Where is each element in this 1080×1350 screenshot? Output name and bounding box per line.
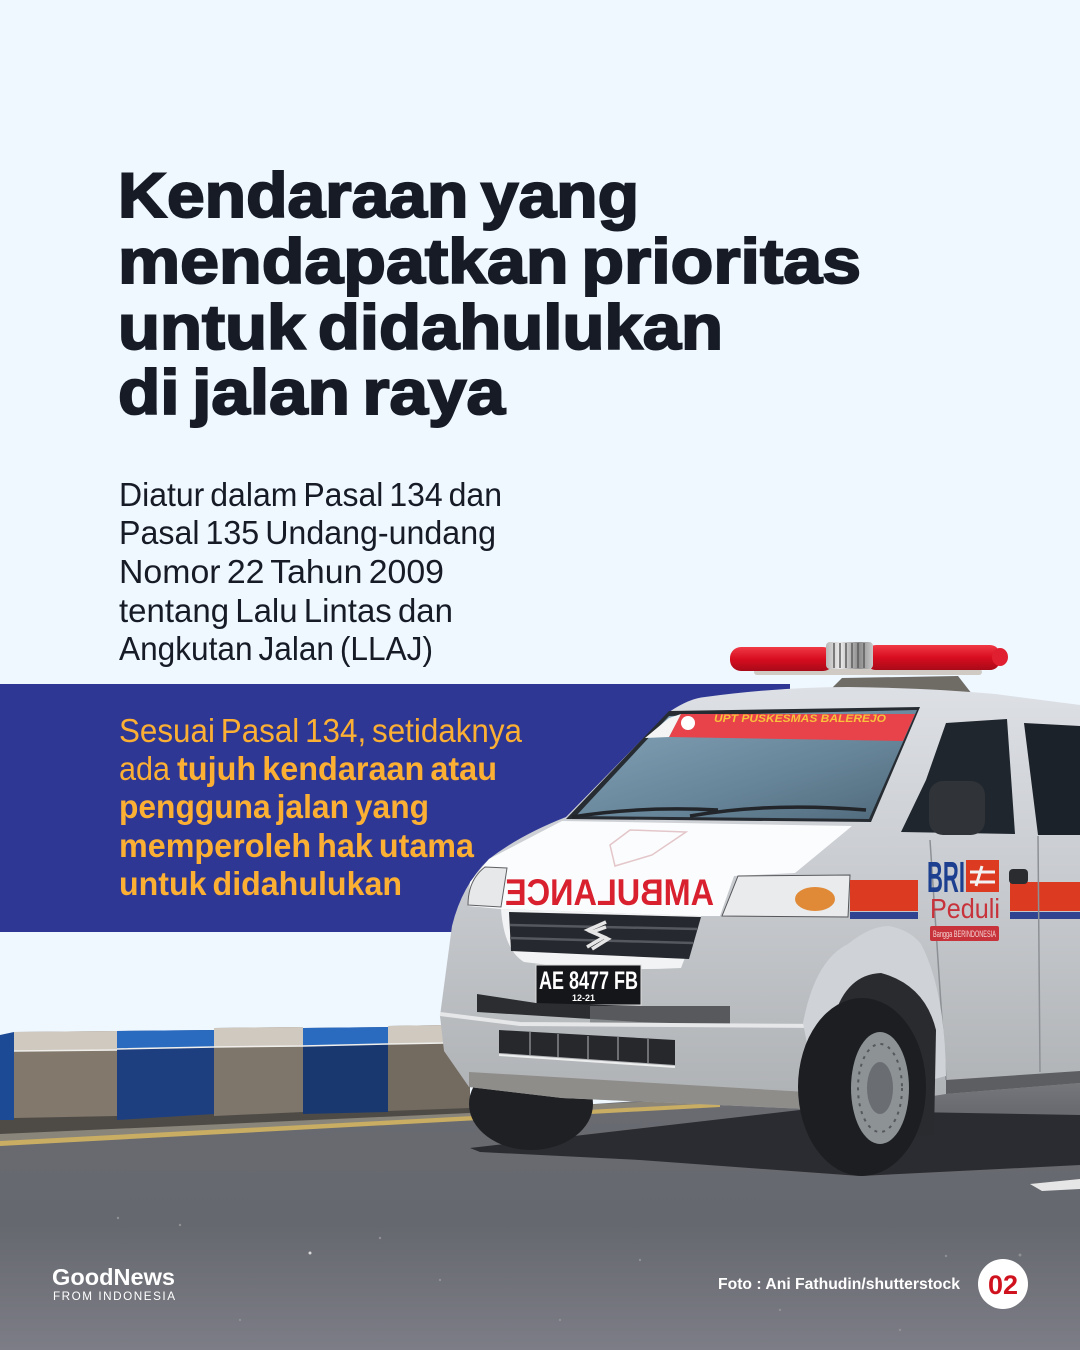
heading (118, 161, 861, 428)
road speckles (117, 1217, 1022, 1331)
GoodNews logo: FROM INDONESIA (53, 1290, 175, 1303)
callout text: untuk didahulukan (119, 865, 402, 902)
intro text block: Diatur dalam Pasal 134 dan (119, 476, 502, 513)
intro text block: Nomor 22 Tahun 2009 (119, 553, 444, 590)
road (0, 1070, 1080, 1350)
right headlight (722, 875, 850, 917)
front grille (509, 912, 701, 959)
under bumper (469, 1072, 807, 1109)
intro text block: Angkutan Jalan (LLAJ) (119, 630, 433, 667)
mirrored AMBULANCE lettering: AMBULANCE (505, 872, 714, 913)
hood (468, 821, 852, 916)
page number badge (978, 1259, 1028, 1309)
grille surround (501, 909, 701, 969)
left headlight (468, 867, 507, 907)
hood emblem faint (610, 830, 686, 866)
heading: di jalan raya (118, 358, 506, 428)
side mirror (929, 781, 985, 835)
photo credit: Foto : Ani Fathudin/shutterstock (718, 1276, 960, 1293)
callout text: tujuh kendaraan atau (177, 750, 497, 787)
heading: Kendaraan yang (118, 161, 639, 231)
sill (946, 1071, 1080, 1094)
bumper air intake upper (477, 994, 730, 1025)
front tyre and rim (798, 998, 926, 1176)
callout text: ada (119, 750, 171, 787)
BRI Peduli decal: BRI (927, 853, 965, 902)
license plate (536, 965, 641, 1005)
car shadow on road (470, 1110, 1080, 1176)
windshield (566, 707, 920, 822)
intro text block: Pasal 135 Undang-undang (119, 514, 496, 551)
heading: untuk didahulukan (118, 293, 723, 363)
emergency light bar (730, 642, 1008, 671)
Suzuki emblem (587, 922, 608, 949)
road marking (1030, 1179, 1080, 1191)
BRI Peduli decal: Peduli (930, 893, 1000, 924)
BRI Peduli decal: Bangga BERINDONESIA (933, 929, 996, 939)
wipers (572, 807, 866, 817)
intro text block: tentang Lalu Lintas dan (119, 592, 453, 629)
front-left tyre (469, 1058, 593, 1150)
road edge line (0, 1103, 720, 1146)
ambulance photo illustration (440, 642, 1080, 1176)
callout text: memperoleh hak utama (119, 827, 475, 864)
lower intake (499, 1030, 675, 1067)
GoodNews logo: GoodNews (52, 1264, 175, 1290)
sticker text: UPT PUSKESMAS BALEREJO (714, 713, 886, 725)
heading: mendapatkan prioritas (118, 227, 861, 297)
door handle (1009, 869, 1028, 884)
roadside kerb (0, 1025, 470, 1134)
callout text: Sesuai Pasal 134, setidaknya (119, 712, 523, 749)
kerb highlight line (14, 1043, 445, 1051)
callout text (119, 712, 523, 902)
roof light base (754, 669, 982, 694)
GoodNews logo (52, 1264, 175, 1303)
vehicle body (440, 687, 1080, 1109)
windshield sticker strip (669, 714, 915, 741)
BRI Peduli decal (927, 853, 1000, 941)
license plate: AE 8477 FB (539, 967, 638, 995)
panel: blue band (0, 684, 790, 932)
wheel arch and fender (803, 926, 946, 1110)
intro text block (119, 476, 502, 667)
page number badge: 02 (988, 1270, 1018, 1300)
side windows (901, 719, 1080, 835)
bumper (440, 1014, 828, 1026)
door seams (930, 836, 1040, 1080)
red side stripes (850, 880, 1080, 919)
callout text: pengguna jalan yang (119, 788, 429, 825)
road shoulder (0, 1098, 720, 1142)
license plate: 12-21 (572, 993, 595, 1003)
